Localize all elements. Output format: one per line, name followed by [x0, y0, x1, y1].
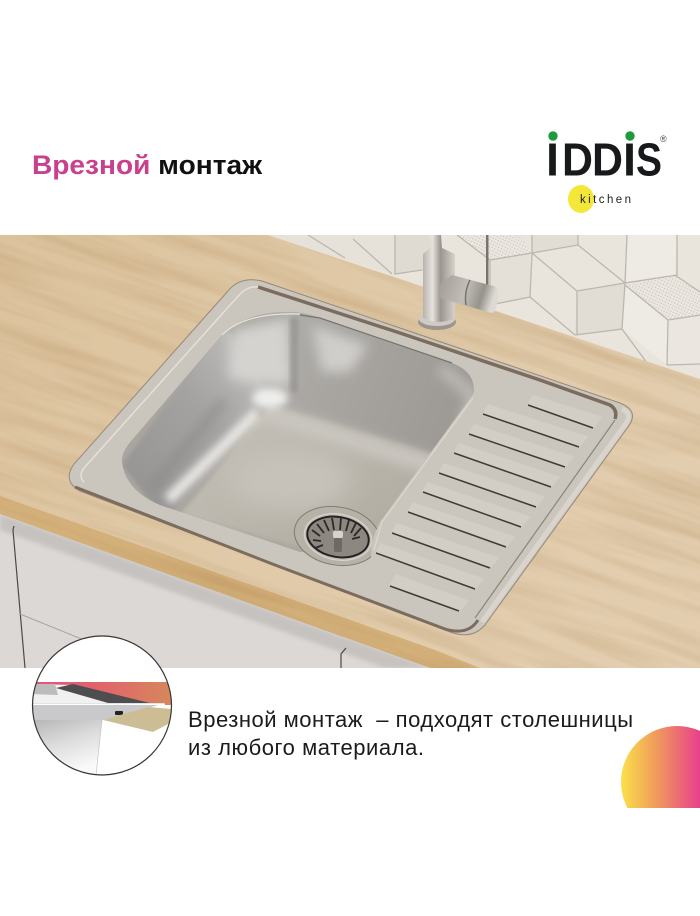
sink rim [69, 280, 632, 635]
chipboard core [103, 707, 172, 732]
description text: из любого материала. [188, 735, 424, 760]
cabinet fronts [0, 514, 430, 668]
inset: cross-section of the cut-in mounting [30, 636, 175, 776]
product photo [0, 235, 700, 668]
steel sink [69, 280, 632, 635]
bowl wall [34, 720, 102, 768]
sink bowl [122, 312, 474, 552]
faucet [418, 235, 498, 330]
sink interior [33, 684, 108, 703]
sink flange [30, 703, 165, 720]
tiled backsplash [260, 235, 700, 390]
description text: Врезной монтаж – подходят столешницы [188, 707, 633, 732]
red countertop [32, 682, 175, 705]
decorative gradient circle [621, 726, 700, 808]
drainboard corner [371, 394, 474, 558]
logo: IDDIS kitchen: I [546, 134, 559, 186]
title: Врезной монтаж [32, 150, 263, 180]
logo: IDDIS kitchen: I [623, 134, 636, 186]
drain strainer [294, 506, 377, 566]
logo: IDDIS kitchen: D [592, 134, 623, 186]
logo: IDDIS kitchen: ® [660, 134, 667, 144]
drainboard ribs [376, 396, 601, 611]
logo: IDDIS kitchen: D [562, 134, 593, 186]
logo: IDDIS kitchen: kitchen [580, 194, 631, 206]
wooden countertop [0, 235, 700, 668]
logo: IDDIS kitchen: S [636, 134, 662, 186]
description text [188, 707, 633, 760]
logo: IDDIS kitchen [546, 131, 667, 213]
